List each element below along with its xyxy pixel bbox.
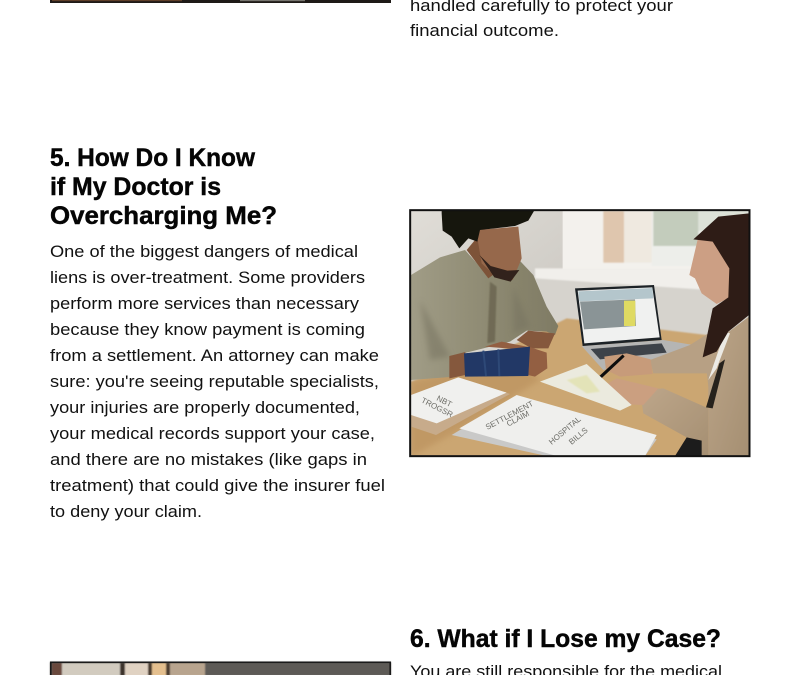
top photo fragment <box>50 0 391 3</box>
document labels: TROGSR <box>420 396 454 419</box>
woman <box>595 213 749 456</box>
document labels: BILLS <box>567 426 590 447</box>
text: section 5 body: to deny your claim. <box>50 503 202 521</box>
heading: section 5 <box>50 144 277 230</box>
photo: client and attorney reviewing documents <box>410 210 750 457</box>
document labels <box>420 394 590 447</box>
text: section 5 body: liens is over-treatment. Some providers <box>50 269 365 287</box>
text: section 5 body: your medical records support your case, <box>50 425 375 443</box>
heading: section 6: 6. What if I Lose my Case? <box>410 625 721 653</box>
text: end of section 4 <box>410 0 674 40</box>
text: section 5 body: One of the biggest dangers of medical <box>50 243 358 261</box>
laptop <box>575 285 693 370</box>
text: section 5 body: because they know payment is coming <box>50 321 365 339</box>
documents <box>411 364 657 456</box>
text: section 5 body: treatment) that could give the insurer fuel <box>50 477 385 495</box>
text: section 5 body: your injuries are properly documented, <box>50 399 360 417</box>
text: section 5 body: sure: you're seeing reputable specialists, <box>50 373 379 391</box>
heading: section 5: if My Doctor is <box>50 173 221 201</box>
text: section 5 body <box>50 243 385 521</box>
document labels: CLAIM <box>505 409 531 428</box>
bottom photo fragment <box>50 662 391 675</box>
document labels: HOSPITAL <box>547 414 583 447</box>
document labels: NBT <box>435 394 454 409</box>
text: section 5 body: perform more services than necessary <box>50 295 360 313</box>
document labels: SETTLEMENT <box>484 399 535 432</box>
man <box>411 211 558 380</box>
text: section 5 body: and there are no mistakes (like gaps in <box>50 451 367 469</box>
text: section 5 body: from a settlement. An attorney can make <box>50 347 379 365</box>
text: end of section 4: financial outcome. <box>410 22 559 40</box>
table <box>411 318 708 456</box>
heading: section 5: 5. How Do I Know <box>50 144 256 172</box>
heading: section 5: Overcharging Me? <box>50 202 277 230</box>
